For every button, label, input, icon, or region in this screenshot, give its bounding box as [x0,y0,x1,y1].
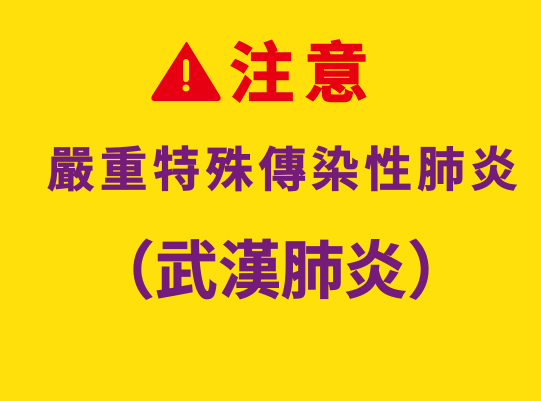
icon: warning triangle [152,43,220,100]
title line: disease name: 嚴重特殊傳染性肺炎 [47,144,523,198]
subtitle: Wuhan pneumonia: （武漢肺炎） [92,237,470,307]
heading: caution: 注意 [229,37,379,110]
